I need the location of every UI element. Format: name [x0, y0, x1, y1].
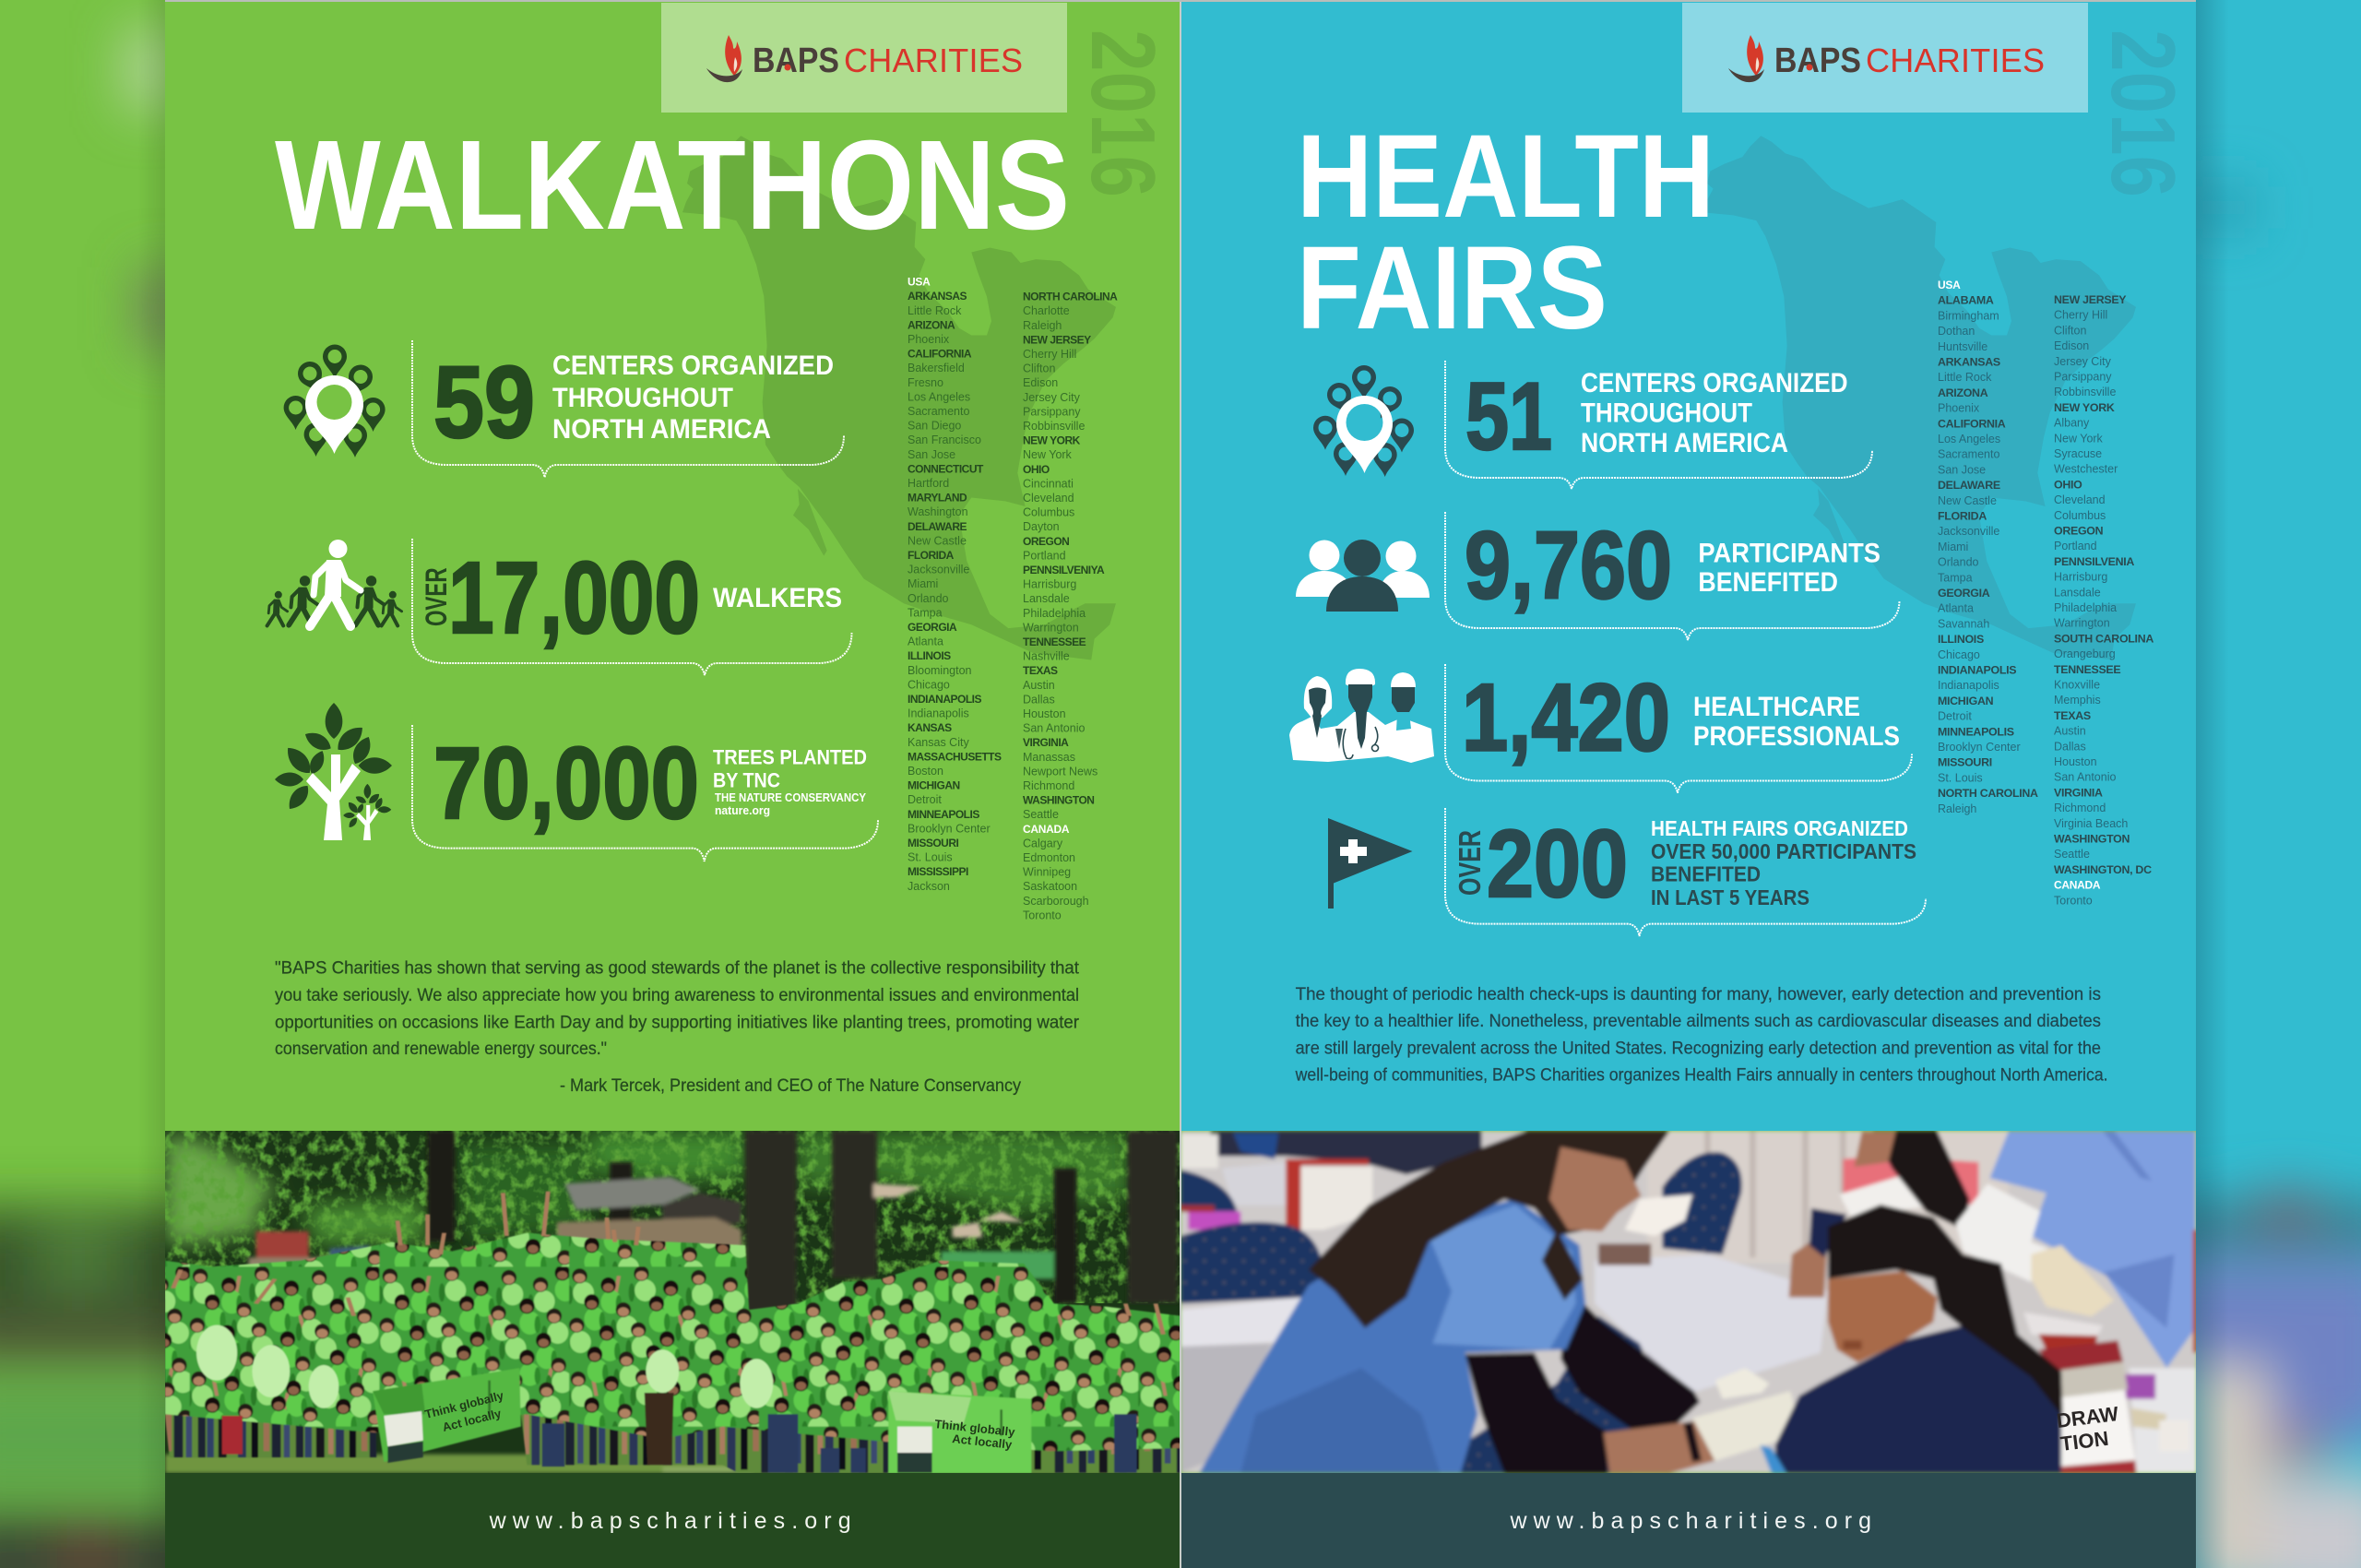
- city list: column 2: TENNESSEE: [1023, 636, 1086, 648]
- icon: flame logo: [706, 35, 742, 82]
- city list: column 1: MICHIGAN: [908, 779, 960, 792]
- photo: walkathon crowd: [165, 1131, 1180, 1473]
- stat label: HEALTH FAIRS ORGANIZED: [1651, 816, 1908, 840]
- description paragraph: well-being of communities, BAPS Charities organizes Health Fairs annually in centers throughout North America.: [1295, 1066, 2108, 1086]
- city list: column 1: CALIFORNIA: [908, 348, 972, 361]
- city list: column 2: Richmond: [1023, 779, 1074, 792]
- city list: column 2: Warrington: [1023, 621, 1079, 634]
- city list: column 2: CANADA: [2054, 879, 2101, 892]
- city list: column 1: San Francisco: [908, 434, 981, 446]
- city list: column 2: NEW JERSEY: [2054, 293, 2127, 306]
- stat: 9,760 participants: 9,760: [1465, 513, 1672, 620]
- description paragraph: The thought of periodic health check-ups is daunting for many, however, early detection and prevention is: [1296, 985, 2101, 1004]
- city list: column 1: ALABAMA: [1938, 294, 1994, 307]
- city list: column 2: VIRGINIA: [1023, 736, 1069, 749]
- city list: column 2: Jersey City: [2054, 355, 2112, 368]
- city list: column 1: Los Angeles: [908, 390, 970, 403]
- city list: column 2: Scarborough: [1023, 895, 1089, 908]
- banner text: Think globally: [934, 1417, 1016, 1439]
- quote: nature conservancy: "BAPS Charities has shown that serving as good stewards of the planet is the collective responsibility that: [275, 959, 1080, 979]
- city list: column 1: Indianapolis: [1938, 679, 1999, 692]
- city list: column 2: Dallas: [1023, 693, 1055, 706]
- stat: 51 centers: 51: [1465, 363, 1552, 470]
- city list: column 2: TENNESSEE: [2054, 663, 2120, 676]
- left blurred background strip: [0, 0, 221, 1568]
- city list: column 1: KANSAS: [908, 721, 952, 734]
- stat: 70,000 trees: [412, 725, 878, 861]
- city list: column 1: Fresno: [908, 376, 943, 389]
- logo wordmark: BAPS: [753, 42, 839, 80]
- city list: column 1: DELAWARE: [908, 520, 967, 533]
- stat: 17,000 walkers: [412, 539, 852, 675]
- city list: column 2: Houston: [1023, 707, 1066, 720]
- city list: column 2: Portland: [2054, 540, 2097, 552]
- city list: column 1: ARKANSAS: [908, 290, 967, 303]
- stat label: [713, 745, 867, 817]
- year 2016: 2016: [2093, 30, 2194, 197]
- city list: column 2: Parsippany: [2054, 371, 2112, 384]
- city list: column 1: San Diego: [908, 420, 961, 433]
- banner text: Act locally: [952, 1431, 1014, 1452]
- city list: column 2: Westchester: [2054, 463, 2118, 476]
- city list: column 2: Philadelphia: [1023, 607, 1086, 620]
- city list: column 1: Detroit: [1938, 710, 1972, 723]
- city list: column 1: MISSOURI: [908, 837, 959, 849]
- stat label: [552, 350, 834, 445]
- city list: column 1: MARYLAND: [908, 492, 967, 505]
- stat: 51 centers: [1445, 361, 1872, 489]
- city list: column 2: Nashville: [1023, 650, 1070, 663]
- city list: column 2: Jersey City: [1023, 391, 1081, 404]
- city list: column 1: Atlanta: [908, 636, 943, 648]
- logo wordmark: CHARITIES: [844, 42, 1023, 79]
- city list: column 2: OREGON: [2054, 524, 2104, 537]
- year 2016: 2016: [1073, 30, 1174, 197]
- city list: column 2: Toronto: [1023, 909, 1062, 921]
- city list: column 2: PENNSILVENIYA: [1023, 564, 1105, 576]
- map of North America: [682, 136, 1116, 660]
- stat label: CENTERS ORGANIZED: [552, 350, 834, 381]
- city list: column 2: Orangeburg: [2054, 647, 2116, 660]
- city list: column 2: Charlotte: [1023, 304, 1070, 317]
- city list: column 2: OREGON: [1023, 535, 1069, 548]
- city list: column 1: MISSOURI: [1938, 756, 1992, 769]
- city list: column 2: Raleigh: [1023, 319, 1062, 332]
- city list: column 1: Orlando: [1938, 556, 1979, 569]
- city list: column 1: Jacksonville: [1938, 525, 1999, 538]
- city list: column 2: Edmonton: [1023, 851, 1075, 864]
- city list: column 1: FLORIDA: [908, 549, 955, 562]
- city list: column 1: Brooklyn Center: [908, 822, 991, 835]
- stat label: [1698, 538, 1880, 598]
- city list: column 1: Tampa: [908, 606, 943, 619]
- icon: location pins: [1313, 365, 1414, 477]
- city list: column 1: Chicago: [908, 678, 950, 691]
- city list: column 1: Washington: [908, 505, 968, 518]
- icon: trees: [275, 703, 392, 840]
- banner text: Act locally: [441, 1406, 504, 1434]
- city list: column 2: Albany: [2054, 417, 2090, 430]
- city list: column 1: Birmingham: [1938, 309, 1999, 322]
- city list: column 1: Little Rock: [1938, 371, 1992, 384]
- city list: column 2: TEXAS: [1023, 664, 1058, 677]
- city list: column 1: Savannah: [1938, 617, 1989, 630]
- city list: column 1: MASSACHUSETTS: [908, 750, 1002, 763]
- city list: column 2: Parsippany: [1023, 405, 1081, 418]
- city list: column 1: Phoenix: [908, 333, 950, 346]
- city list: column 1: San Jose: [1938, 463, 1986, 476]
- stat label: nature.org: [715, 803, 770, 817]
- city list: column 2: San Antonio: [1023, 722, 1085, 735]
- stat: 59 centers: 59: [433, 346, 535, 459]
- city list: column 2: Philadelphia: [2054, 601, 2117, 614]
- photo sign text: DRAW: [2056, 1402, 2120, 1432]
- logo box: health fairs: [1682, 3, 2088, 113]
- city list: column 1: Tampa: [1938, 571, 1973, 584]
- city list: column 1: GEORGIA: [1938, 587, 1990, 600]
- logo box: walkathons: [661, 3, 1067, 113]
- city list: column 1: Little Rock: [908, 304, 962, 317]
- city list: column 2: Harrisburg: [1023, 578, 1076, 591]
- city list: column 1: INDIANAPOLIS: [908, 693, 981, 706]
- city list: column 2: Robbinsville: [2054, 386, 2116, 398]
- city list: column 2: Seattle: [1023, 808, 1059, 821]
- stat label: WALKERS: [713, 583, 842, 613]
- city list: column 2: New York: [2054, 432, 2104, 445]
- city list: column 2: Virginia Beach: [2054, 817, 2128, 830]
- stat label: BENEFITED: [1651, 861, 1761, 885]
- city list: column 2: NEW YORK: [1023, 434, 1081, 447]
- city list: column 2: Edison: [1023, 376, 1058, 389]
- city list: column 1: Brooklyn Center: [1938, 741, 2021, 754]
- city list: column 2: Portland: [1023, 549, 1066, 562]
- city list: column 2: Dallas: [2054, 740, 2086, 753]
- logo wordmark: BAPS: [1774, 42, 1861, 80]
- city list: column 2: TEXAS: [2054, 709, 2091, 722]
- city list: column 1: Atlanta: [1938, 602, 1974, 615]
- quote: nature conservancy: opportunities on occasions like Earth Day and by supporting initiatives like planting trees, promoting water: [275, 1013, 1080, 1032]
- stat label: NORTH AMERICA: [552, 414, 771, 445]
- city list: column 1: MICHIGAN: [1938, 695, 1994, 707]
- city list: column 1: Orlando: [908, 592, 949, 605]
- map of North America: [1703, 136, 2136, 660]
- city list: column 1: NORTH CAROLINA: [1938, 787, 2038, 800]
- stat: 17,000 walkers: 17,000: [448, 541, 700, 655]
- stat: 200 health fairs: OVER: [1453, 830, 1487, 896]
- city list: column 1: Hartford: [908, 477, 949, 490]
- city list: column 2: Winnipeg: [1023, 866, 1071, 879]
- footer: walkathons: www.bapscharities.org: [489, 1508, 851, 1534]
- stat label: PARTICIPANTS: [1698, 538, 1880, 568]
- city list: column 1: Bakersfield: [908, 362, 965, 374]
- stat label: BENEFITED: [1698, 567, 1838, 598]
- city list: column 1: St. Louis: [1938, 771, 1983, 784]
- city list: column 1: Jacksonville: [908, 564, 969, 576]
- city list: column 2: OHIO: [1023, 463, 1050, 476]
- stat label: THROUGHOUT: [552, 383, 733, 413]
- city list: column 1: USA: [1938, 279, 1961, 291]
- icon: healthcare professionals: [1289, 669, 1434, 763]
- city list: column 2: Warrington: [2054, 617, 2110, 630]
- city list: column 2: Cherry Hill: [2054, 309, 2107, 322]
- city list: column 1: MINNEAPOLIS: [1938, 725, 2014, 738]
- city list: column 1: St. Louis: [908, 851, 953, 864]
- city list: column 2: OHIO: [2054, 478, 2082, 491]
- city list: column 2: Cleveland: [2054, 493, 2106, 506]
- stat label: THROUGHOUT: [1581, 398, 1752, 428]
- city list: column 2: Calgary: [1023, 837, 1063, 849]
- city list: column 2: Lansdale: [2054, 586, 2101, 599]
- title: walkathons: WALKATHONS: [275, 114, 1070, 256]
- stat label: [1693, 692, 1900, 752]
- city list: column 2: Robbinsville: [1023, 420, 1085, 433]
- city list: column 1: CALIFORNIA: [1938, 417, 2006, 430]
- city list: column 2: CANADA: [1023, 823, 1070, 836]
- city list: column 1: Chicago: [1938, 648, 1980, 661]
- city list: column 1: FLORIDA: [1938, 509, 1987, 522]
- city list: column 1: MISSISSIPPI: [908, 865, 968, 878]
- city list: column 2: Lansdale: [1023, 592, 1070, 605]
- icon: flame logo: [1728, 35, 1764, 82]
- quote: nature conservancy: [275, 959, 1080, 1096]
- stat label: [1651, 816, 1916, 909]
- city list: column 1: Huntsville: [1938, 340, 1987, 353]
- city list: column 2: Columbus: [1023, 506, 1074, 519]
- footer: health fairs: [1181, 1473, 2196, 1568]
- logo wordmark: [753, 42, 1023, 80]
- city list: column 1: ARIZONA: [908, 318, 955, 331]
- city list: column 1: DELAWARE: [1938, 479, 2000, 492]
- city list: column 1: Sacramento: [908, 405, 969, 418]
- city list: column 1: Indianapolis: [908, 707, 969, 720]
- city list: column 2: Austin: [1023, 679, 1055, 692]
- city list: column 2: Memphis: [2054, 694, 2101, 707]
- city list: column 1: Detroit: [908, 793, 942, 806]
- city list: column 2: Cincinnati: [1023, 477, 1074, 490]
- city list: column 1: New Castle: [1938, 494, 1997, 507]
- stat label: PROFESSIONALS: [1693, 721, 1900, 752]
- panel: health fairs: [1181, 0, 2196, 1131]
- panel: walkathons: [165, 0, 1180, 1131]
- city list: column 2: New York: [1023, 448, 1073, 461]
- city list: column 2: Newport News: [1023, 765, 1097, 778]
- photo sign text: TION: [2059, 1427, 2110, 1455]
- city list: column 1: Dothan: [1938, 325, 1975, 338]
- stat: 1,420 professionals: [1445, 664, 1912, 793]
- city list: column 2: Austin: [2054, 725, 2086, 738]
- city list: column 2: PENNSILVENIA: [2054, 555, 2134, 568]
- footer: health fairs: www.bapscharities.org: [1509, 1508, 1871, 1534]
- city list: column 1: New Castle: [908, 534, 967, 547]
- stat: 17,000 walkers: OVER: [420, 568, 453, 626]
- stat label: TREES PLANTED: [713, 745, 867, 769]
- city list: column 2: Columbus: [2054, 509, 2106, 522]
- description paragraph: are still largely prevalent across the United States. Recognizing early detection and prevention as vital for the: [1296, 1039, 2101, 1059]
- city list: column 2: Dayton: [1023, 520, 1060, 533]
- city list: column 2: Cleveland: [1023, 492, 1074, 505]
- city list: column 2: Harrisburg: [2054, 571, 2107, 584]
- city list: column 1: CONNECTICUT: [908, 462, 984, 475]
- city list: column 1: Los Angeles: [1938, 433, 2000, 445]
- city list: column 2: Houston: [2054, 755, 2097, 768]
- city list: column 2: NORTH CAROLINA: [1023, 291, 1118, 303]
- description paragraph: the key to a healthier life. Nonetheless, preventable ailments such as cardiovascular diseases and diabetes: [1296, 1012, 2101, 1031]
- stat label: IN LAST 5 YEARS: [1651, 885, 1809, 909]
- city list: column 1: Phoenix: [1938, 402, 1980, 415]
- right blurred background strip: [2196, 0, 2361, 1568]
- quote: nature conservancy: you take seriously. We also appreciate how you bring awareness to environmental issues and environmental: [275, 986, 1079, 1005]
- icon: medical flag: [1328, 818, 1413, 909]
- footer: walkathons: [165, 1473, 1180, 1568]
- title: health fairs: FAIRS: [1297, 222, 1608, 354]
- title: health fairs: HEALTH: [1297, 111, 1714, 243]
- description paragraph: [1295, 985, 2108, 1086]
- city list: column 1: ILLINOIS: [908, 649, 951, 662]
- city list: column 2: Clifton: [1023, 362, 1055, 375]
- city list: column 2: Seattle: [2054, 848, 2090, 861]
- title: health fairs: [1297, 111, 1714, 354]
- city list: column 2: NEW YORK: [2054, 401, 2115, 414]
- city list: column 2: Syracuse: [2054, 447, 2102, 460]
- stat: 200 health fairs: [1445, 808, 1926, 936]
- icon: location pins: [284, 345, 386, 457]
- city list: column 2: Richmond: [2054, 802, 2106, 814]
- stat: 59 centers: [412, 340, 844, 478]
- top edge line: [165, 0, 2196, 2]
- stat: 1,420 professionals: 1,420: [1462, 664, 1670, 771]
- city list: column 1: Bloomington: [908, 664, 972, 677]
- city list: column 1: ARIZONA: [1938, 386, 1988, 399]
- city list: column 2: Manassas: [1023, 751, 1075, 764]
- city list: column 2: WASHINGTON, DC: [2054, 863, 2152, 876]
- stat: 9,760 participants: [1445, 512, 1900, 640]
- city list: column 1: Jackson: [908, 880, 950, 893]
- city list: column 1: Kansas City: [908, 736, 969, 749]
- logo wordmark: CHARITIES: [1866, 42, 2045, 79]
- banner text: [423, 1388, 1016, 1452]
- city list: column 1: GEORGIA: [908, 621, 957, 634]
- city list: column 2: SOUTH CAROLINA: [2054, 632, 2153, 645]
- city list: column 2: Clifton: [2054, 324, 2086, 337]
- city list: column 1: Miami: [1938, 540, 1968, 553]
- stat label: NORTH AMERICA: [1581, 428, 1788, 458]
- stat: 70,000 trees: 70,000: [433, 727, 699, 840]
- city list: column 2: Saskatoon: [1023, 880, 1077, 893]
- stat label: BY TNC: [713, 769, 780, 791]
- city list: column 1: Sacramento: [1938, 448, 1999, 461]
- city list: column 1: MINNEAPOLIS: [908, 808, 979, 821]
- city list: column 2: Toronto: [2054, 894, 2093, 907]
- city list: column 1: Raleigh: [1938, 802, 1976, 815]
- city list: column 2: Cherry Hill: [1023, 348, 1076, 361]
- city list: column 2: Knoxville: [2054, 679, 2100, 692]
- city list: column 1: San Jose: [908, 448, 955, 461]
- city list: column 1: Miami: [908, 577, 938, 590]
- city list: column 2: WASHINGTON: [1023, 794, 1094, 807]
- stat label: HEALTHCARE: [1693, 692, 1860, 722]
- stat label: CENTERS ORGANIZED: [1581, 368, 1848, 398]
- city list: column 2: VIRGINIA: [2054, 786, 2103, 799]
- city list: column 2: San Antonio: [2054, 771, 2116, 784]
- panel divider: [1180, 0, 1181, 1568]
- city list: column 1: ILLINOIS: [1938, 633, 1984, 646]
- city list: column 1: INDIANAPOLIS: [1938, 664, 2016, 677]
- city list: column 1: Boston: [908, 765, 943, 778]
- logo wordmark: [1774, 42, 2045, 80]
- city list: column 1: USA: [908, 276, 931, 289]
- quote: nature conservancy: - Mark Tercek, President and CEO of The Nature Conservancy: [560, 1076, 1021, 1096]
- banner text: Think globally: [423, 1388, 505, 1421]
- photo sign text: [2057, 1406, 2118, 1450]
- stat label: [1581, 368, 1848, 458]
- stat label: OVER 50,000 PARTICIPANTS: [1651, 839, 1916, 863]
- icon: walkers: [267, 540, 402, 626]
- icon: participants: [1296, 540, 1430, 612]
- city list: column 2: NEW JERSEY: [1023, 333, 1091, 346]
- photo: health fair blood draw: [1180, 1131, 2197, 1473]
- city list: column 2: Edison: [2054, 339, 2089, 352]
- quote: nature conservancy: conservation and renewable energy sources.": [275, 1039, 607, 1059]
- stat label: THE NATURE CONSERVANCY: [715, 790, 866, 804]
- city list: column 2: WASHINGTON: [2054, 833, 2130, 846]
- stat: 200 health fairs: 200: [1487, 811, 1628, 918]
- city list: column 1: ARKANSAS: [1938, 356, 2000, 369]
